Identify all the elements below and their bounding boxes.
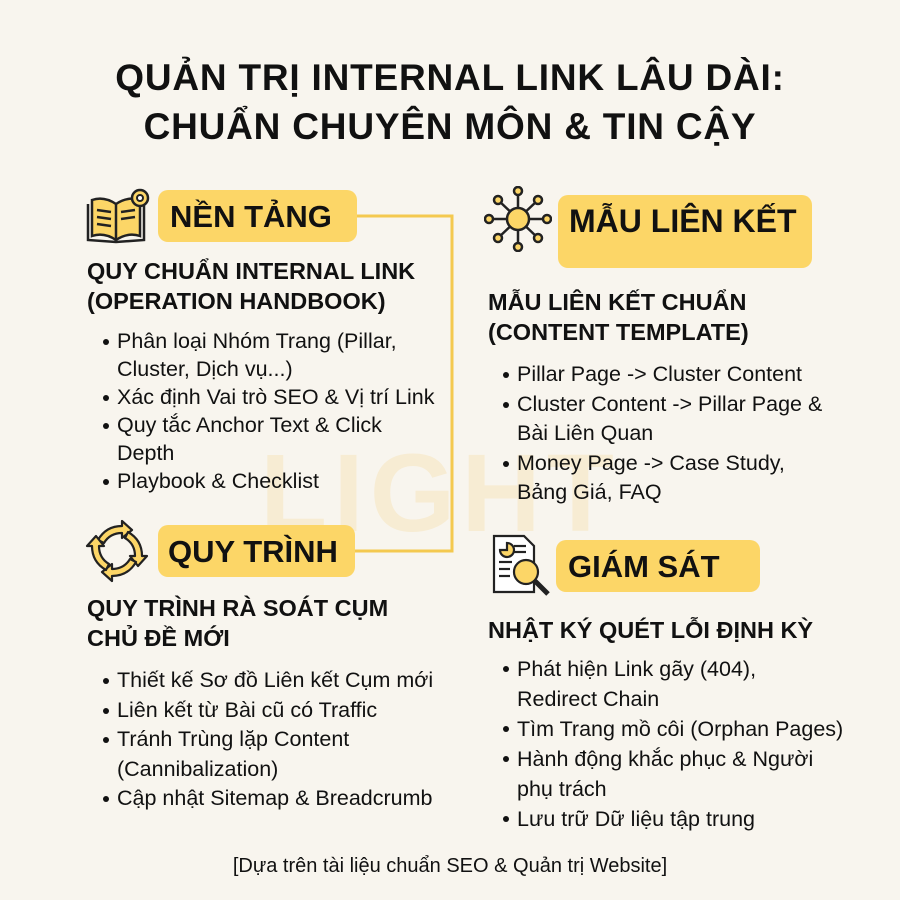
- bullets: quy trình: Cập nhật Sitemap & Breadcrumb: [117, 786, 432, 810]
- bullets: nền tảng: Phân loại Nhóm Trang (Pillar,: [117, 329, 397, 353]
- bullets: quy trình: Liên kết từ Bài cũ có Traffic: [117, 698, 377, 722]
- pill: nền tảng: [158, 190, 357, 242]
- icon: cycle arrows: [86, 520, 148, 582]
- icon: report magnifier: [492, 534, 550, 596]
- bullets: giám sát: Phát hiện Link gãy (404),: [517, 657, 756, 681]
- bullets: quy trình: Tránh Trùng lặp Content: [117, 727, 349, 751]
- heading: quy trình rà soát: [87, 595, 388, 651]
- watermark: LIGHT: [260, 432, 620, 555]
- heading: quy chuẩn: QUY CHUẨN INTERNAL LINK: [87, 258, 415, 284]
- heading: mẫu liên kết chuẩn: MẪU LIÊN KẾT CHUẨN: [488, 289, 746, 315]
- bullets: mẫu liên kết: Money Page -> Case Study,: [517, 450, 785, 474]
- icon: network: [484, 186, 552, 252]
- bullets: nền tảng: Playbook & Checklist: [117, 469, 319, 493]
- pill: quy trình: QUY TRÌNH: [168, 534, 338, 569]
- bullets: mẫu liên kết: [503, 362, 822, 504]
- bullets: giám sát: phụ trách: [517, 777, 607, 801]
- bullets: nền tảng: [103, 329, 434, 493]
- heading: quy chuẩn: (OPERATION HANDBOOK): [87, 288, 386, 314]
- footer: [Dựa trên tài liệu chuẩn SEO & Quản trị Website]: [233, 855, 667, 877]
- icon: book gear: [86, 188, 150, 244]
- bullets: nền tảng: Depth: [117, 441, 174, 465]
- bullets: nền tảng: Quy tắc Anchor Text & Click: [117, 413, 382, 437]
- bullets: giám sát: [503, 657, 843, 831]
- text: CHUẨN CHUYÊN MÔN & TIN CẬY: [144, 106, 756, 147]
- pill: giám sát: [556, 540, 760, 592]
- bullets: giám sát: Lưu trữ Dữ liệu tập trung: [517, 807, 755, 831]
- pill: giám sát: GIÁM SÁT: [568, 549, 720, 584]
- bullets: mẫu liên kết: Pillar Page -> Cluster Content: [517, 362, 802, 386]
- pill: quy trình: [158, 525, 355, 577]
- heading: nhật ký: NHẬT KÝ QUÉT LỖI ĐỊNH KỲ: [488, 617, 813, 643]
- bullets: mẫu liên kết: Bảng Giá, FAQ: [517, 480, 662, 504]
- bullets: giám sát: Redirect Chain: [517, 687, 659, 711]
- bullets: mẫu liên kết: Bài Liên Quan: [517, 421, 653, 445]
- bullets: quy trình: [103, 668, 433, 810]
- bullets: mẫu liên kết: Cluster Content -> Pillar Page &: [517, 392, 822, 416]
- pill: nền tảng: NỀN TẢNG: [170, 199, 332, 234]
- bullets: quy trình: Thiết kế Sơ đồ Liên kết Cụm mới: [117, 668, 433, 692]
- pill: mẫu liên kết: [558, 195, 812, 268]
- title: QUẢN TRỊ INTERNAL LINK LÂU DÀI:: [115, 57, 785, 98]
- heading: quy trình rà soát: CHỦ ĐỀ MỚI: [87, 625, 230, 651]
- bullets: giám sát: Hành động khắc phục & Người: [517, 747, 813, 771]
- bullets: giám sát: Tìm Trang mồ côi (Orphan Pages): [517, 717, 843, 741]
- bullets: nền tảng: Xác định Vai trò SEO & Vị trí Link: [117, 385, 434, 409]
- bullets: quy trình: (Cannibalization): [117, 756, 278, 780]
- heading: mẫu liên kết chuẩn: (CONTENT TEMPLATE): [488, 319, 749, 345]
- bullets: nền tảng: Cluster, Dịch vụ...): [117, 357, 293, 381]
- heading: quy chuẩn: [87, 258, 415, 314]
- heading: mẫu liên kết chuẩn: [488, 289, 749, 345]
- pill: mẫu liên kết: MẪU LIÊN KẾT: [569, 203, 797, 239]
- heading: quy trình rà soát: QUY TRÌNH RÀ SOÁT CỤM: [87, 595, 388, 621]
